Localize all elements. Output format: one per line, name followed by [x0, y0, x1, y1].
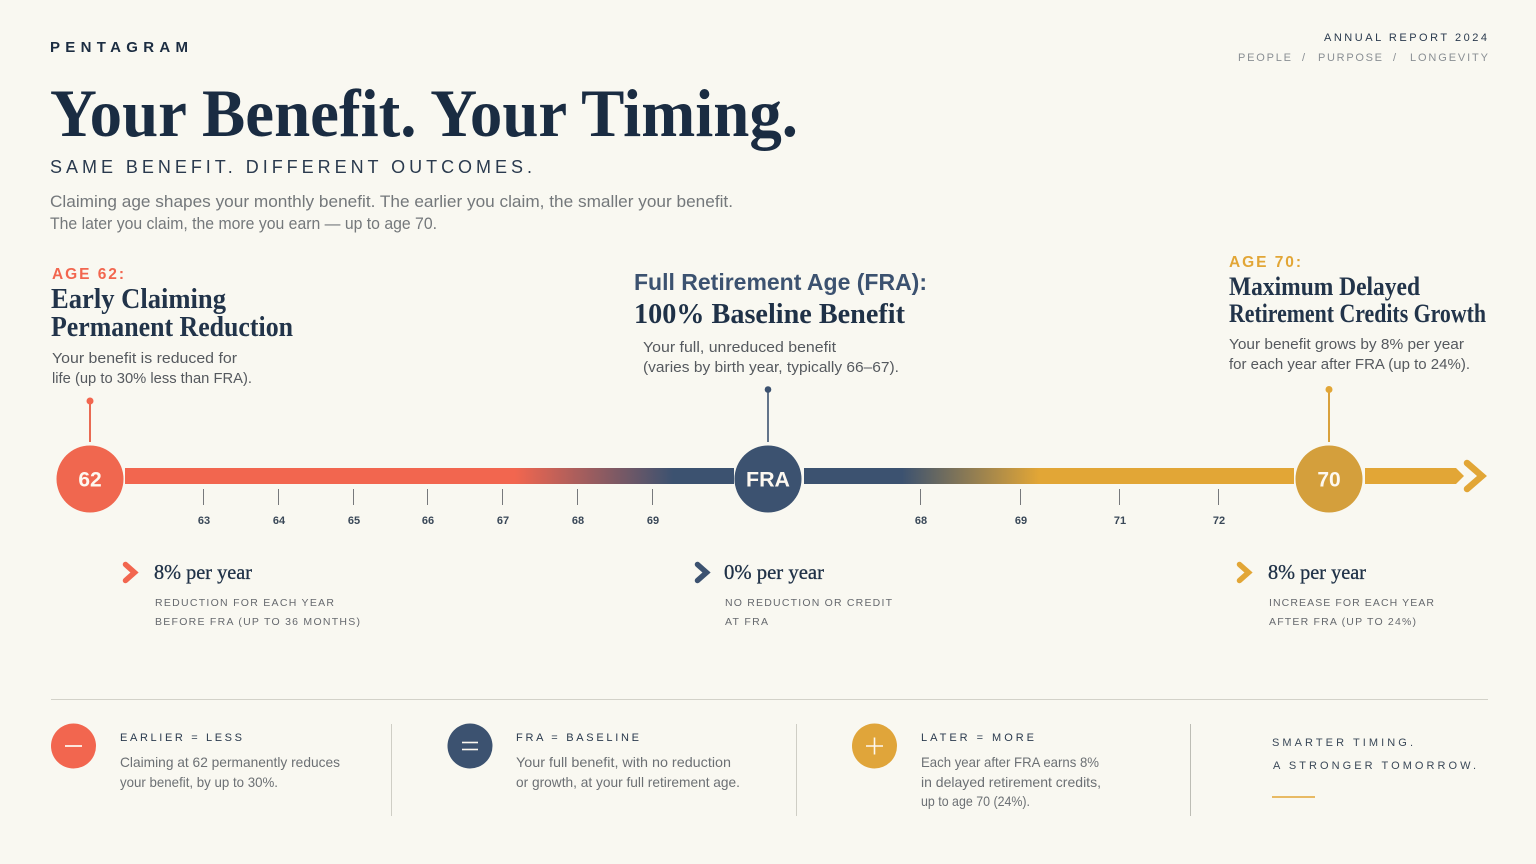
tick marks and age labels	[198, 489, 1225, 527]
rate: early: REDUCTION FOR EACH YEAR	[155, 597, 334, 609]
icon: chevron navy	[698, 564, 706, 580]
rate: early: 8% per year	[154, 560, 252, 584]
rate: FRA: NO REDUCTION OR CREDIT	[725, 597, 893, 609]
pin: 70	[1326, 386, 1332, 442]
summary: later = more: Each year after FRA earns 8%	[921, 754, 1099, 770]
bar: early segment	[125, 468, 734, 484]
report label	[1238, 32, 1489, 64]
timeline	[56, 386, 1482, 527]
panel: FRA heading: Your full, unreduced benefit	[643, 339, 837, 356]
bar: final segment with arrow	[1365, 468, 1464, 484]
icon: minus	[51, 724, 96, 768]
rate: late: 8% per year	[1268, 560, 1366, 584]
intro text: Claiming age shapes your monthly benefit. The earlier you claim, the smaller your benefit.	[50, 193, 733, 211]
rate: late: AFTER FRA (UP TO 24%)	[1269, 616, 1416, 628]
summary: earlier = less: Claiming at 62 permanently reduces	[120, 754, 340, 770]
subtitle: SAME BENEFIT. DIFFERENT OUTCOMES.	[50, 157, 532, 177]
icon: arrowhead	[1467, 463, 1482, 489]
pin: 62	[86, 398, 94, 442]
rate: FRA: AT FRA	[725, 616, 768, 628]
summary: earlier = less	[51, 724, 340, 790]
panel: age 70 heading: Your benefit grows by 8% per year	[1229, 336, 1464, 353]
summary: FRA = baseline: FRA = BASELINE	[516, 732, 639, 744]
title: Your Benefit. Your Timing.	[50, 75, 798, 151]
summary: later = more: LATER = MORE	[921, 732, 1034, 744]
panel: FRA heading: Full Retirement Age (FRA):	[634, 269, 927, 295]
intro text	[50, 193, 733, 233]
bar: late segment	[804, 468, 1294, 484]
closing statement: A STRONGER TOMORROW.	[1273, 760, 1476, 772]
report label: PEOPLE	[1238, 52, 1291, 64]
icon: chevron coral	[126, 564, 134, 580]
closing statement	[1272, 737, 1476, 797]
tick marks and age labels: 69	[1015, 515, 1027, 527]
panel: age 70 heading: Maximum Delayed	[1229, 271, 1420, 301]
tick marks and age labels: 64	[273, 515, 286, 527]
summary: FRA = baseline: Your full benefit, with no reduction	[516, 754, 731, 770]
rate: FRA	[698, 560, 893, 628]
summary: earlier = less: your benefit, by up to 30%.	[120, 774, 278, 790]
report label: ANNUAL REPORT 2024	[1324, 32, 1487, 44]
pin: FRA	[765, 386, 771, 442]
closing statement: SMARTER TIMING.	[1272, 737, 1413, 749]
tick marks and age labels: 68	[915, 515, 927, 527]
panel: age 70 heading: AGE 70:	[1229, 254, 1301, 271]
marker: 70: 70	[1317, 468, 1341, 492]
rate: FRA: 0% per year	[724, 560, 824, 584]
panel: age 62 heading	[51, 266, 293, 387]
rate: early	[126, 560, 360, 628]
tick marks and age labels: 71	[1114, 515, 1126, 527]
marker: 70	[1296, 446, 1362, 512]
icon: equals	[448, 724, 492, 768]
summary: later = more: up to age 70 (24%).	[921, 793, 1030, 809]
summary: later = more: in delayed retirement credits,	[921, 774, 1101, 790]
marker: 62	[56, 446, 124, 512]
icon: chevron gold	[1240, 564, 1248, 580]
summary: later = more	[852, 724, 1101, 809]
panel: age 70 heading: Retirement Credits Growth	[1229, 298, 1486, 328]
report label: /	[1302, 52, 1306, 64]
panel: age 62 heading: Permanent Reduction	[51, 312, 293, 343]
marker: FRA	[734, 446, 802, 512]
summary: FRA = baseline	[448, 724, 740, 790]
report label: /	[1393, 52, 1397, 64]
panel: age 62 heading: AGE 62:	[52, 266, 124, 283]
brand wordmark: PENTAGRAM	[50, 39, 188, 56]
rate: early: BEFORE FRA (UP TO 36 MONTHS)	[155, 616, 360, 628]
tick marks and age labels: 65	[348, 515, 360, 527]
summary: FRA = baseline: or growth, at your full retirement age.	[516, 774, 740, 790]
panel: FRA heading: 100% Baseline Benefit	[634, 298, 905, 330]
panel: age 70 heading	[1229, 254, 1486, 373]
report label: PURPOSE	[1318, 52, 1382, 64]
marker: FRA: FRA	[746, 468, 790, 492]
marker: 62: 62	[78, 468, 102, 492]
panel: age 62 heading: life (up to 30% less than FRA).	[52, 370, 252, 387]
tick marks and age labels: 67	[497, 515, 509, 527]
report label: LONGEVITY	[1410, 52, 1489, 64]
rate: late	[1240, 560, 1434, 628]
panel: age 62 heading: Early Claiming	[51, 284, 226, 315]
panel: FRA heading	[634, 269, 927, 376]
icon: plus	[852, 724, 897, 768]
summary: earlier = less: EARLIER = LESS	[120, 732, 242, 744]
tick marks and age labels: 72	[1213, 515, 1225, 527]
panel: FRA heading: (varies by birth year, typically 66–67).	[643, 359, 899, 376]
intro text: The later you claim, the more you earn — up to age 70.	[50, 215, 437, 233]
panel: age 62 heading: Your benefit is reduced for	[52, 350, 237, 367]
panel: age 70 heading: for each year after FRA (up to 24%).	[1229, 356, 1470, 373]
rate: late: INCREASE FOR EACH YEAR	[1269, 597, 1434, 609]
tick marks and age labels: 66	[422, 515, 434, 527]
tick marks and age labels: 68	[572, 515, 584, 527]
tick marks and age labels: 69	[647, 515, 659, 527]
tick marks and age labels: 63	[198, 515, 210, 527]
